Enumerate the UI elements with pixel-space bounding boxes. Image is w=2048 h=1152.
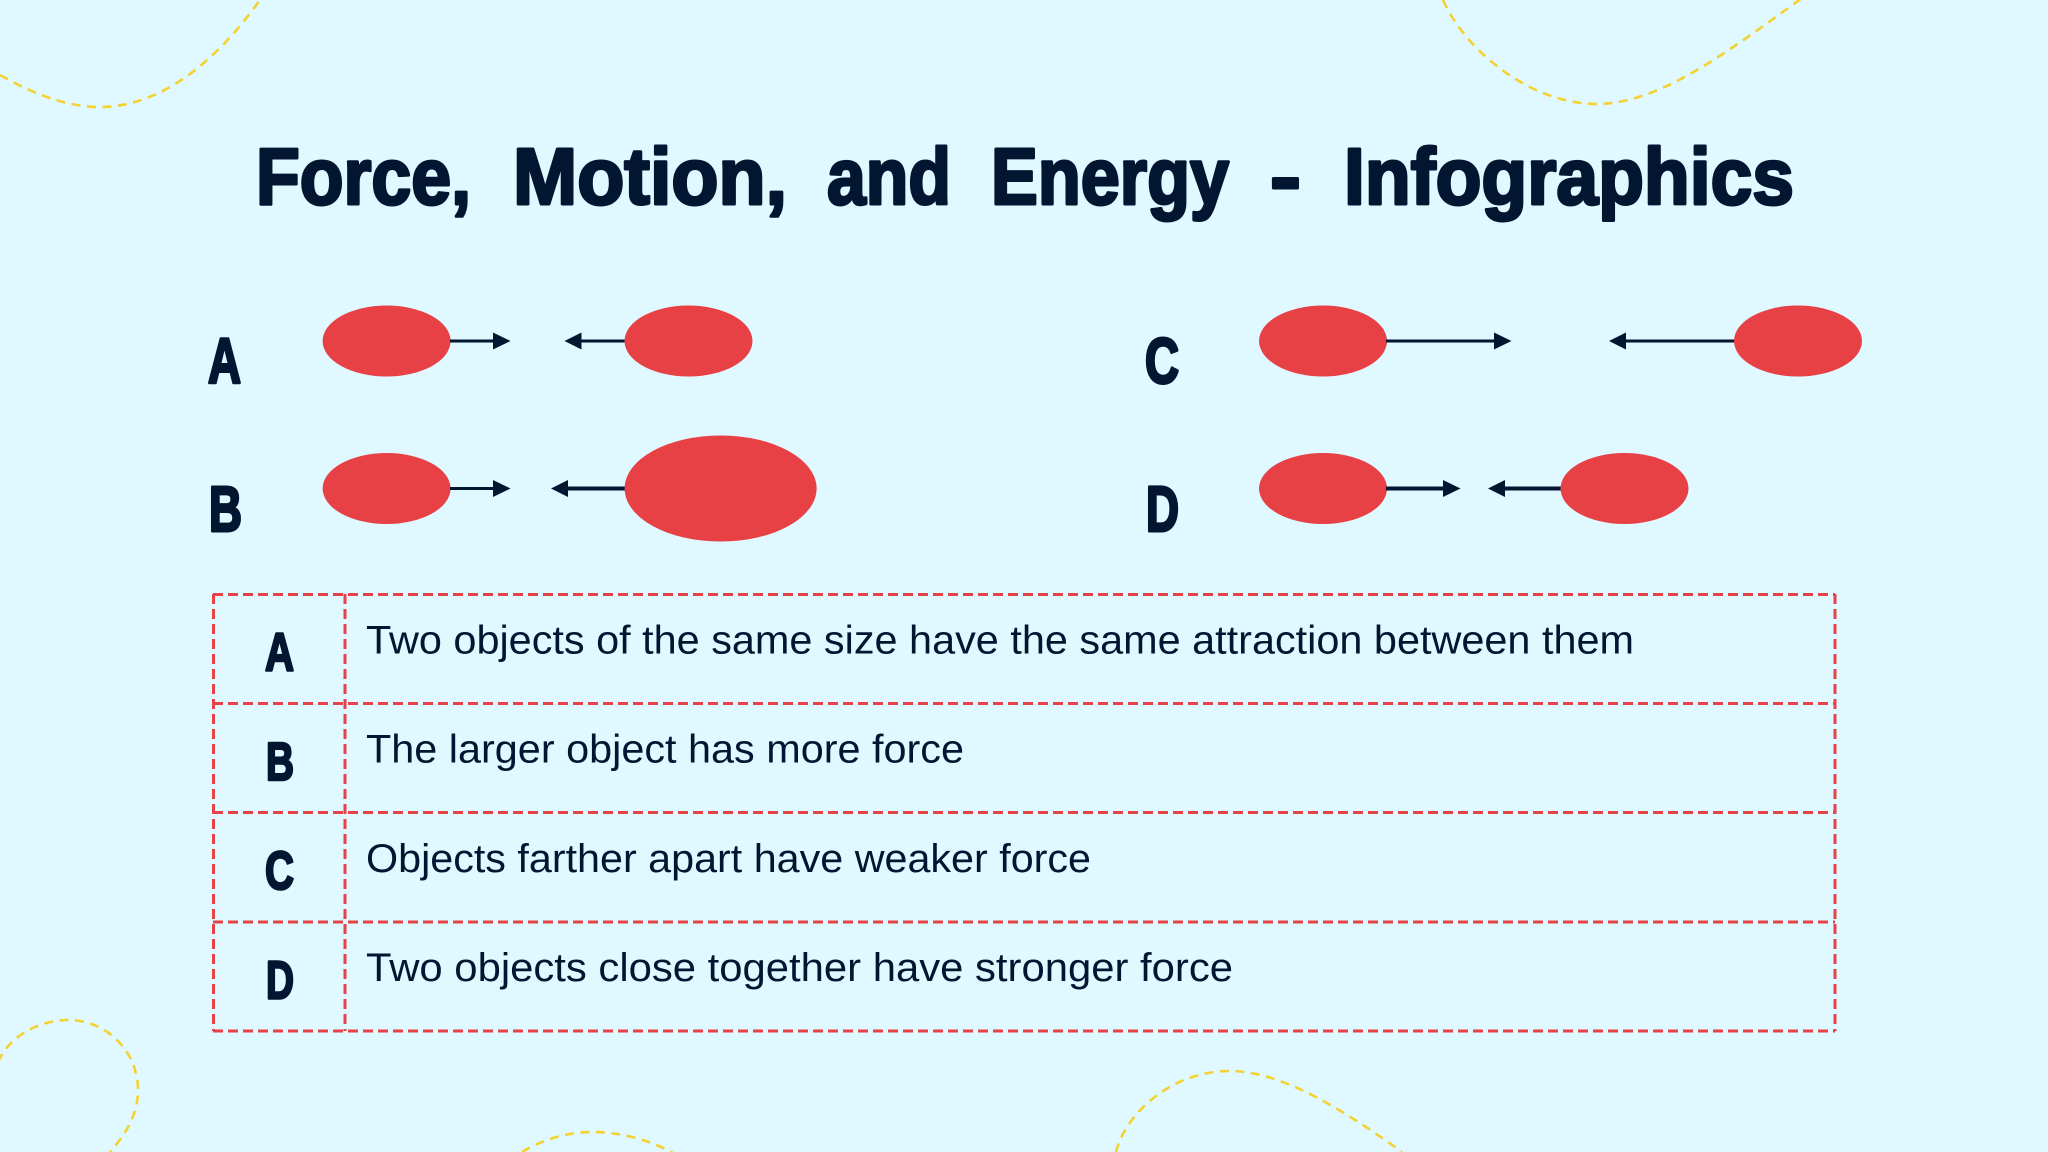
label C: C — [1145, 325, 1179, 397]
object A right — [624, 306, 752, 376]
row C: Objects farther apart have weaker force — [366, 837, 1091, 881]
row D — [266, 946, 1233, 1010]
row C: C — [265, 841, 294, 901]
title: Energy — [991, 132, 1229, 221]
diagram B: larger object — [209, 436, 817, 545]
object D right — [1560, 453, 1688, 524]
label B: B — [209, 473, 242, 545]
arrow A left-pointing — [564, 332, 625, 350]
title — [256, 132, 1794, 221]
row B: B — [266, 732, 294, 792]
diagram D: close together — [1146, 453, 1688, 545]
arrow B right-pointing — [450, 480, 510, 497]
row A — [265, 618, 1634, 682]
row B: The larger object has more force — [366, 728, 964, 772]
object C left — [1259, 306, 1387, 376]
title: Infographics — [1344, 132, 1794, 221]
row A: Two objects of the same size have the same attraction between them — [366, 618, 1634, 662]
object B right large — [625, 436, 817, 542]
diagram C: farther apart — [1145, 306, 1862, 397]
row A: A — [265, 622, 294, 682]
object C right — [1734, 306, 1862, 376]
diagram A: equal objects — [208, 306, 752, 397]
arrow B left-pointing — [551, 480, 625, 497]
title: - — [1270, 132, 1301, 221]
title: Force, — [256, 132, 471, 221]
object D left — [1259, 453, 1387, 524]
arrow D right-pointing — [1386, 480, 1460, 497]
label A: A — [208, 325, 241, 397]
row C — [265, 837, 1091, 901]
arrow C right-pointing — [1386, 332, 1512, 350]
arrow C left-pointing — [1609, 332, 1735, 350]
object A left — [323, 306, 451, 376]
title: Motion, — [513, 132, 787, 221]
label D: D — [1146, 473, 1179, 545]
title: and — [827, 132, 951, 221]
table — [213, 594, 1835, 1031]
table grid — [213, 594, 1835, 1031]
row B — [266, 728, 964, 792]
row D: D — [266, 950, 294, 1010]
arrow A right-pointing — [450, 332, 510, 350]
row D: Two objects close together have stronger force — [366, 946, 1233, 990]
object B left — [323, 453, 451, 524]
arrow D left-pointing — [1488, 480, 1562, 497]
